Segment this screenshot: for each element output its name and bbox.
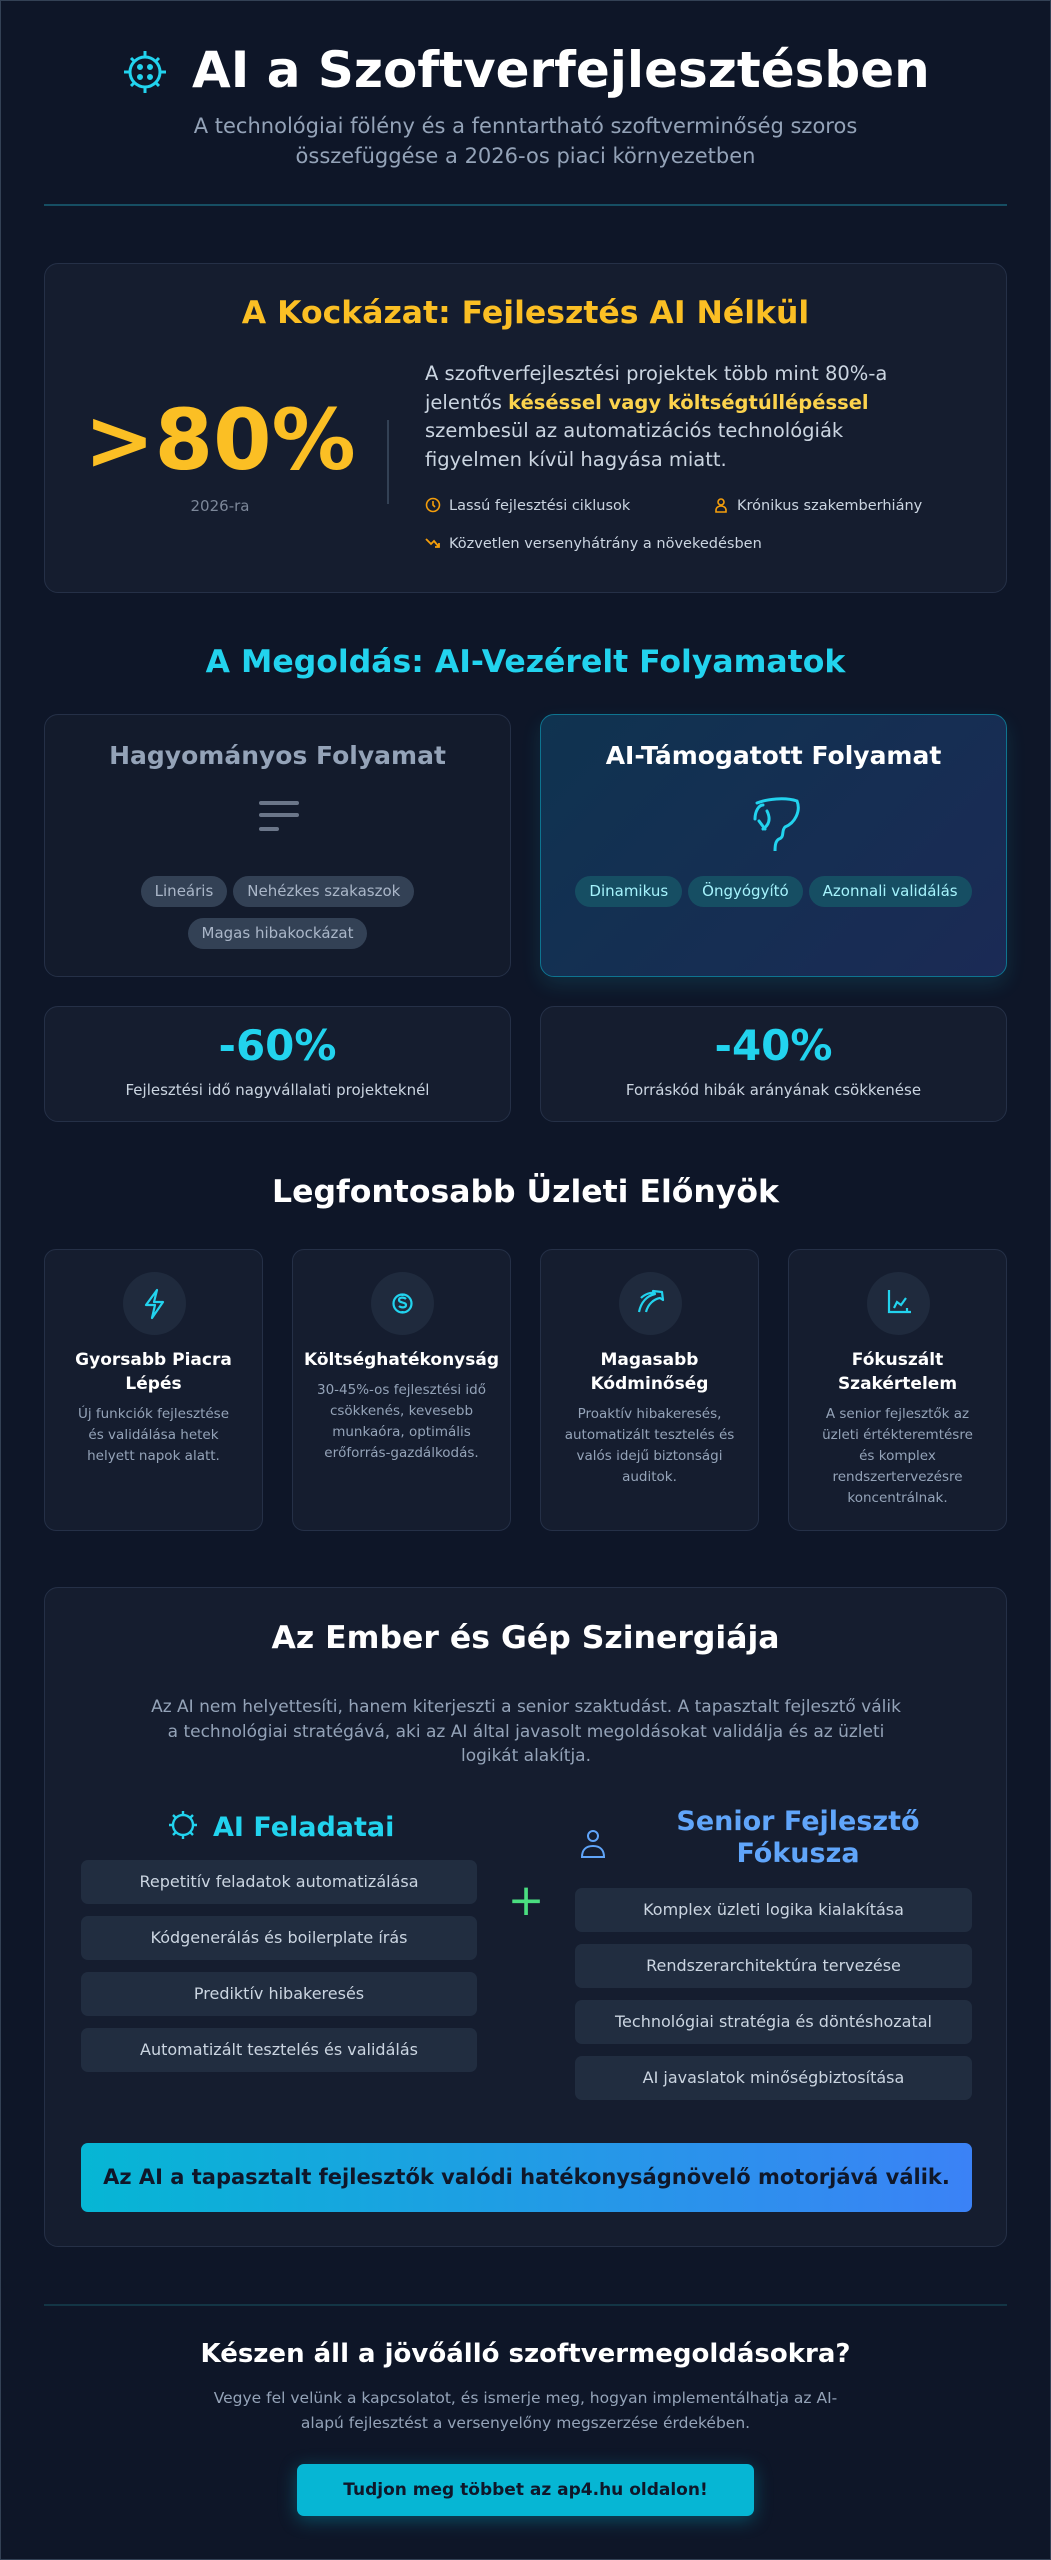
icon: flow scribble: [754, 797, 800, 851]
benefit card: quality: Proaktív hibakeresés, automatizált tesztelés és valós idejű biztonsági auditok.: [565, 1406, 734, 1485]
icon: coin: [371, 1272, 434, 1335]
panel: synergy: Rendszerarchitektúra tervezése: [646, 1956, 901, 1975]
tags: Azonnali validálás: [823, 882, 958, 900]
panel: synergy: Automatizált tesztelés és validálás: [140, 2040, 418, 2059]
benefit card: quality: [540, 1249, 759, 1531]
stat card: -40%: Forráskód hibák arányának csökkenése: [626, 1081, 921, 1099]
panel: risk: [44, 263, 1007, 593]
icon: trend: [619, 1272, 682, 1335]
risk paragraph: A szoftverfejlesztési projektek több mint 80%-a jelentős késéssel vagy költségtúllépéssel szembesül az automatizációs technológiák figyelmen kívül hagyása miatt.: [425, 362, 887, 470]
CTA button: Tudjon meg többet az ap4.hu oldalon!: [343, 2480, 708, 2500]
tags: Dinamikus: [589, 882, 668, 900]
benefit card: focus: [788, 1249, 1007, 1531]
synergy paragraph: a technológiai stratégává, aki az AI által javasolt megoldásokat validálja és az üzleti: [168, 1722, 884, 1742]
benefit card: focus: A senior fejlesztők az üzleti értékteremtésre és komplex rendszertervezésre koncentrálnak.: [822, 1406, 973, 1506]
plus sign: +: [508, 1875, 544, 1926]
header icon: chip: [124, 51, 166, 93]
benefit card: faster: Új funkciók fejlesztése és validálása hetek helyett napok alatt.: [78, 1406, 229, 1464]
panel: traditional process: [44, 714, 511, 977]
synergy paragraph: logikát alakítja.: [461, 1746, 591, 1766]
bullet: slow cycles: Lassú fejlesztési ciklusok: [449, 498, 630, 514]
synergy heading: Az Ember és Gép Szinergiája: [271, 1620, 780, 1656]
solution heading: A Megoldás: AI-Vezérelt Folyamatok: [206, 644, 845, 680]
icon: chart: [867, 1272, 930, 1335]
panel: synergy: [44, 1587, 1007, 2247]
benefit card: faster: Gyorsabb Piacra: [75, 1350, 232, 1370]
benefit card: quality: Kódminőség: [591, 1374, 708, 1394]
panel: synergy: Kódgenerálás és boilerplate írás: [150, 1928, 407, 1947]
senior icon: person: [581, 1830, 605, 1858]
panel: AI-assisted process: [540, 714, 1007, 977]
benefit card: cost: Költséghatékonyság: [304, 1350, 499, 1370]
benefit card: faster: Lépés: [125, 1374, 182, 1394]
risk heading: A Kockázat: Fejlesztés AI Nélkül: [242, 295, 809, 331]
tags: Lineáris: [155, 882, 213, 900]
bullet: shortage: Krónikus szakemberhiány: [737, 498, 922, 514]
AI task list: Repetitív feladatok automatizálása: [139, 1872, 419, 1891]
title: AI a Szoftverfejlesztésben: [192, 41, 930, 99]
stat card: -40%: [540, 1006, 1007, 1122]
synergy paragraph: [151, 1697, 901, 1766]
tags: Nehézkes szakaszok: [247, 882, 400, 900]
icon: lines: [259, 801, 299, 831]
stat card: -40%: -40%: [715, 1021, 832, 1070]
AI tasks heading: AI Feladatai: [213, 1812, 394, 1843]
card title: Hagyományos Folyamat: [109, 741, 446, 770]
stat caption: 2026-ra: [191, 497, 249, 515]
CTA text: Vegye fel velünk a kapcsolatot, és ismerje meg, hogyan implementálhatja az AI-alapú fejlesztést a versenyelőny megszerzése érdekében.: [214, 2389, 837, 2432]
panel: synergy: Prediktív hibakeresés: [194, 1984, 364, 2003]
stat card: -60%: [44, 1006, 511, 1122]
card title: AI-Támogatott Folyamat: [606, 741, 941, 770]
conclusion banner: Az AI a tapasztalt fejlesztők valódi hatékonyságnövelő motorjává válik.: [103, 2165, 950, 2189]
tags: Öngyógyító: [702, 882, 789, 900]
benefit card: quality: Magasabb: [601, 1350, 698, 1370]
AI task list: [81, 1860, 477, 1904]
stat card: -60%: -60%: [219, 1021, 336, 1070]
big stat >80%: >80%: [84, 391, 356, 489]
CTA button: [297, 2464, 754, 2516]
senior list: Komplex üzleti logika kialakítása: [643, 1900, 904, 1919]
benefits heading: Legfontosabb Üzleti Előnyök: [272, 1174, 779, 1210]
bullet: competitive disadvantage: Közvetlen versenyhátrány a növekedésben: [449, 536, 762, 552]
senior list: [575, 1888, 972, 1932]
conclusion banner: [81, 2143, 972, 2212]
subtitle: A technológiai fölény és a fenntartható szoftverminőség szoros összefüggése a 2026-os piaci környezetben: [194, 114, 857, 168]
CTA heading: Készen áll a jövőálló szoftvermegoldásokra?: [200, 2339, 850, 2369]
icon: bolt: [123, 1272, 186, 1335]
tags: [141, 876, 414, 907]
panel: synergy: AI javaslatok minőségbiztosítása: [643, 2068, 904, 2087]
benefit card: cost: 30-45%-os fejlesztési idő csökkenés, kevesebb munkaóra, optimális erőforrás-gazdálkodás.: [317, 1382, 486, 1461]
benefit card: focus: Szakértelem: [838, 1374, 957, 1394]
benefit card: faster: [44, 1249, 263, 1531]
tags: [575, 876, 972, 907]
stat card: -60%: Fejlesztési idő nagyvállalati projekteknél: [126, 1081, 429, 1099]
panel: synergy: Technológiai stratégia és döntéshozatal: [615, 2012, 932, 2031]
senior heading: Senior Fejlesztő Fókusza: [676, 1806, 920, 1869]
benefit card: focus: Fókuszált: [852, 1350, 943, 1370]
panel: traditional process: Magas hibakockázat: [202, 924, 353, 942]
synergy paragraph: Az AI nem helyettesíti, hanem kiterjeszti a senior szaktudást. A tapasztalt fejlesztő válik: [151, 1697, 901, 1717]
benefit card: cost: [292, 1249, 511, 1531]
